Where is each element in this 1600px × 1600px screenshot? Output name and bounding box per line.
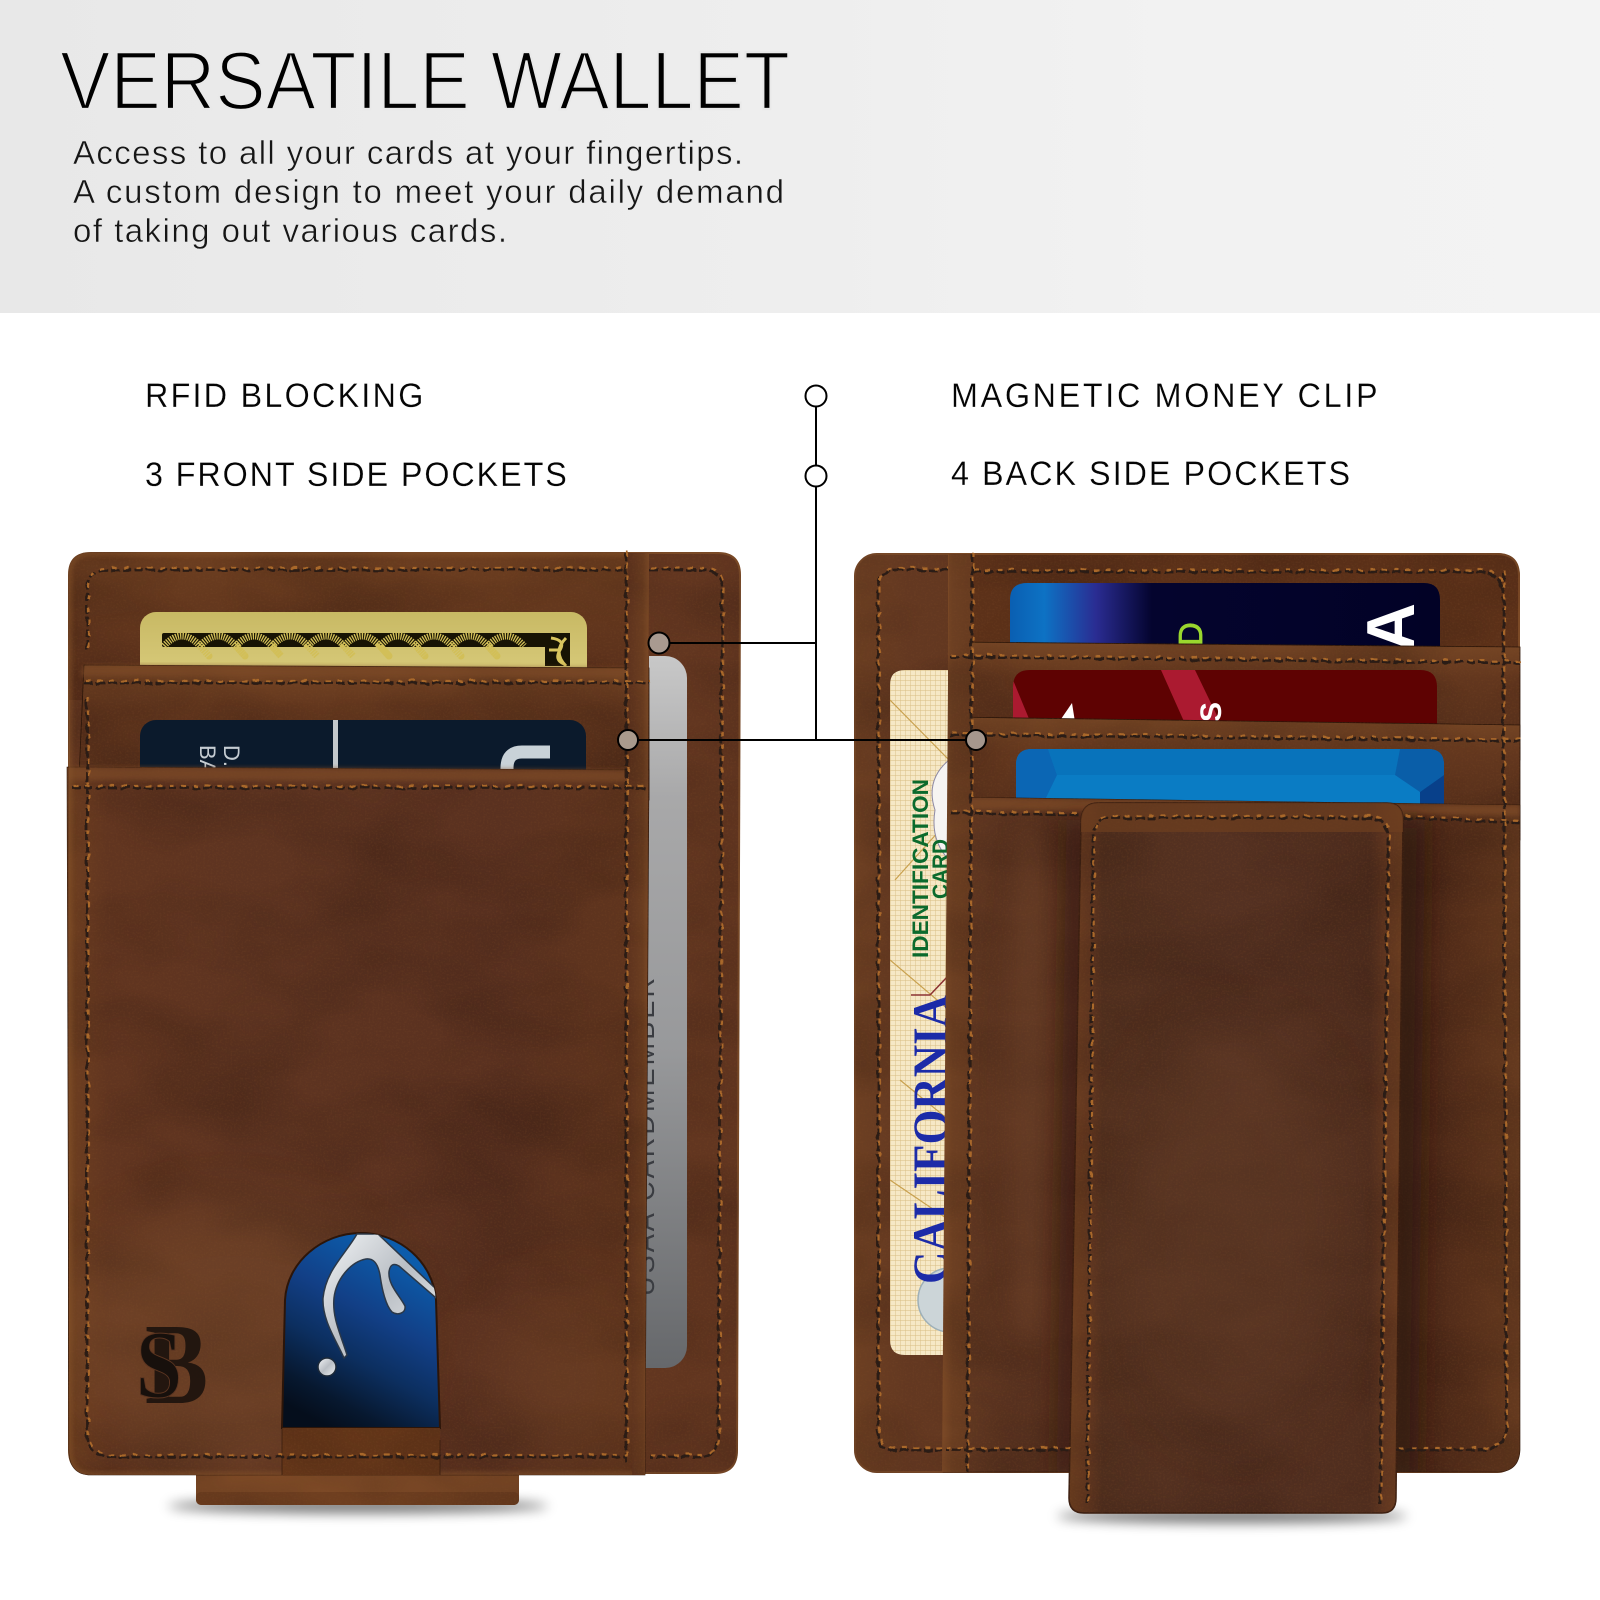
navy card: A (1353, 603, 1429, 652)
brand monogram: B (145, 1301, 208, 1429)
California ID card: CALIFORNIA (902, 995, 958, 1284)
intro text: of taking out various cards. (73, 212, 507, 249)
California ID card: IDENTIFICATION (908, 779, 933, 958)
brand monogram: S (136, 1311, 182, 1418)
middle pocket (78, 665, 649, 800)
gold card (140, 612, 587, 668)
back panel (69, 553, 740, 1473)
California ID card: CARD (928, 839, 953, 899)
antler logo (323, 1234, 436, 1358)
feature labels left (145, 377, 567, 494)
thumb slot with blue card (282, 1233, 440, 1428)
left stitching (878, 568, 952, 1450)
back panel stitching (650, 568, 724, 1457)
back stitching (945, 552, 1522, 1503)
vertical seam strip (942, 554, 972, 1472)
money clip tab (196, 1462, 519, 1505)
feature labels left: 3 FRONT SIDE POCKETS (145, 456, 567, 494)
wallet back (855, 552, 1522, 1523)
title: VERSATILE WALLET (60, 34, 790, 127)
vertical seam strip (628, 553, 649, 1475)
red card (1013, 670, 1437, 724)
panel lighting and clip shadows (950, 797, 1520, 1480)
feature labels left: RFID BLOCKING (145, 377, 423, 415)
money clip (1069, 803, 1403, 1513)
dark card (140, 720, 586, 770)
clip shadow (168, 1499, 548, 1513)
header band (0, 0, 1600, 313)
California ID card (890, 670, 948, 1355)
navy card (1010, 583, 1440, 646)
front stitching (72, 551, 650, 1465)
leather lighting (60, 553, 649, 1475)
wallet front (60, 551, 740, 1513)
slot tab (282, 1428, 440, 1475)
lower pocket (943, 797, 1520, 1472)
second pocket (950, 642, 1520, 760)
top pocket (69, 553, 649, 700)
feature labels right: MAGNETIC MONEY CLIP (951, 377, 1378, 415)
feature labels right (951, 377, 1378, 493)
intro text (73, 134, 784, 249)
clip shadow (1057, 1509, 1407, 1523)
marker: front pocket point (618, 730, 638, 750)
red card: S (1195, 702, 1228, 722)
silver card (646, 656, 687, 1368)
marker: RFID point on wallet (648, 632, 670, 654)
blue card (1016, 749, 1444, 804)
silver card: USAA CARDMEMBER (630, 978, 660, 1296)
callout connectors (618, 386, 986, 750)
intro text: A custom design to meet your daily demand (73, 173, 784, 210)
top pocket (949, 554, 1519, 680)
marker: RFID (806, 386, 826, 406)
marker: back pocket point (966, 730, 986, 750)
dark card: D. (219, 745, 244, 767)
intro text: Access to all your cards at your fingertips. (73, 134, 743, 171)
dark card: BA (195, 745, 220, 775)
marker: pockets (806, 466, 826, 486)
back panel (855, 554, 1519, 1472)
front pocket (67, 767, 649, 1475)
navy card: D (1172, 622, 1209, 646)
feature labels right: 4 BACK SIDE POCKETS (951, 455, 1350, 493)
third pocket (950, 717, 1520, 840)
